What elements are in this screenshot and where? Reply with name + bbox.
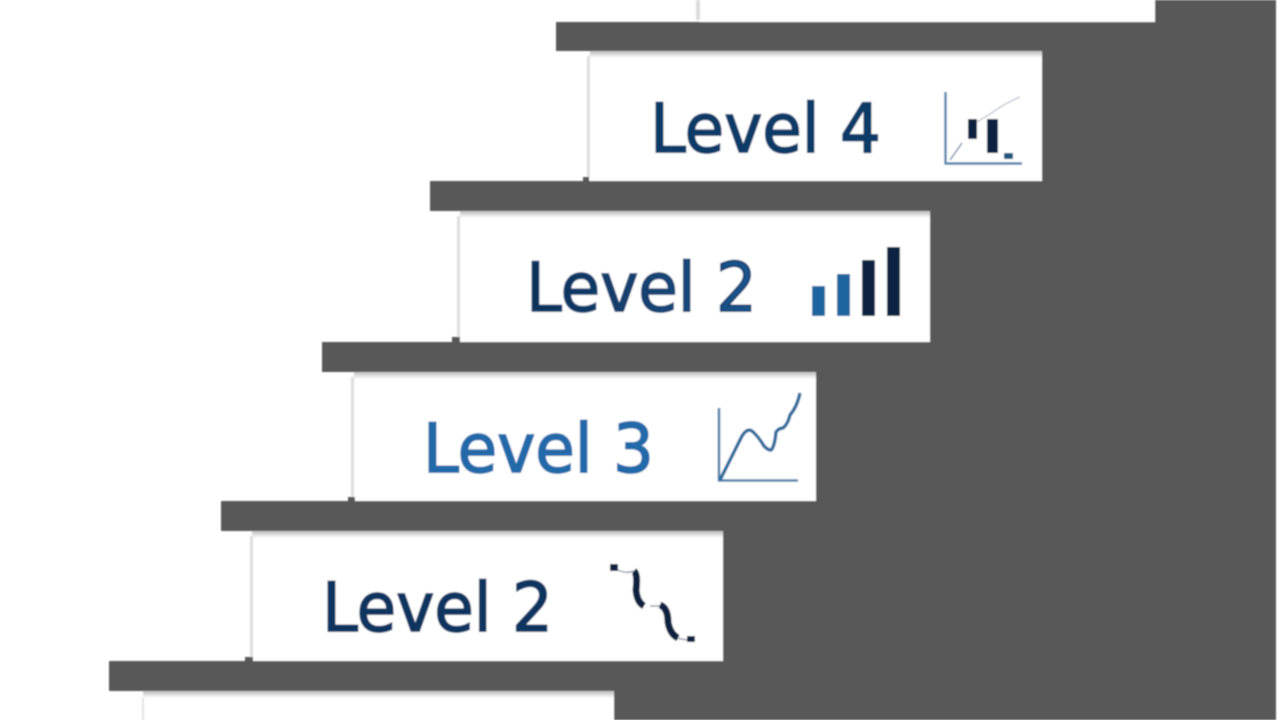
label: Level 2: Level 2 [322, 568, 553, 647]
label: Level 4: Level 4 [650, 89, 881, 168]
icon: bar chart with curve [946, 92, 1022, 164]
step: Level 3 [348, 372, 816, 502]
step: Level 4 [583, 51, 1042, 182]
label: Level 3: Level 3 [423, 409, 654, 488]
step: Level 2 upper [452, 211, 930, 342]
step: bottom face [142, 691, 614, 720]
icon: rising bars [812, 247, 900, 316]
icon: line chart [719, 393, 800, 480]
top step face [696, 0, 1155, 22]
label: Level 2: Level 2 [526, 248, 757, 327]
step: Level 2 lower [245, 531, 723, 662]
icon: wavy descending line [610, 564, 695, 642]
